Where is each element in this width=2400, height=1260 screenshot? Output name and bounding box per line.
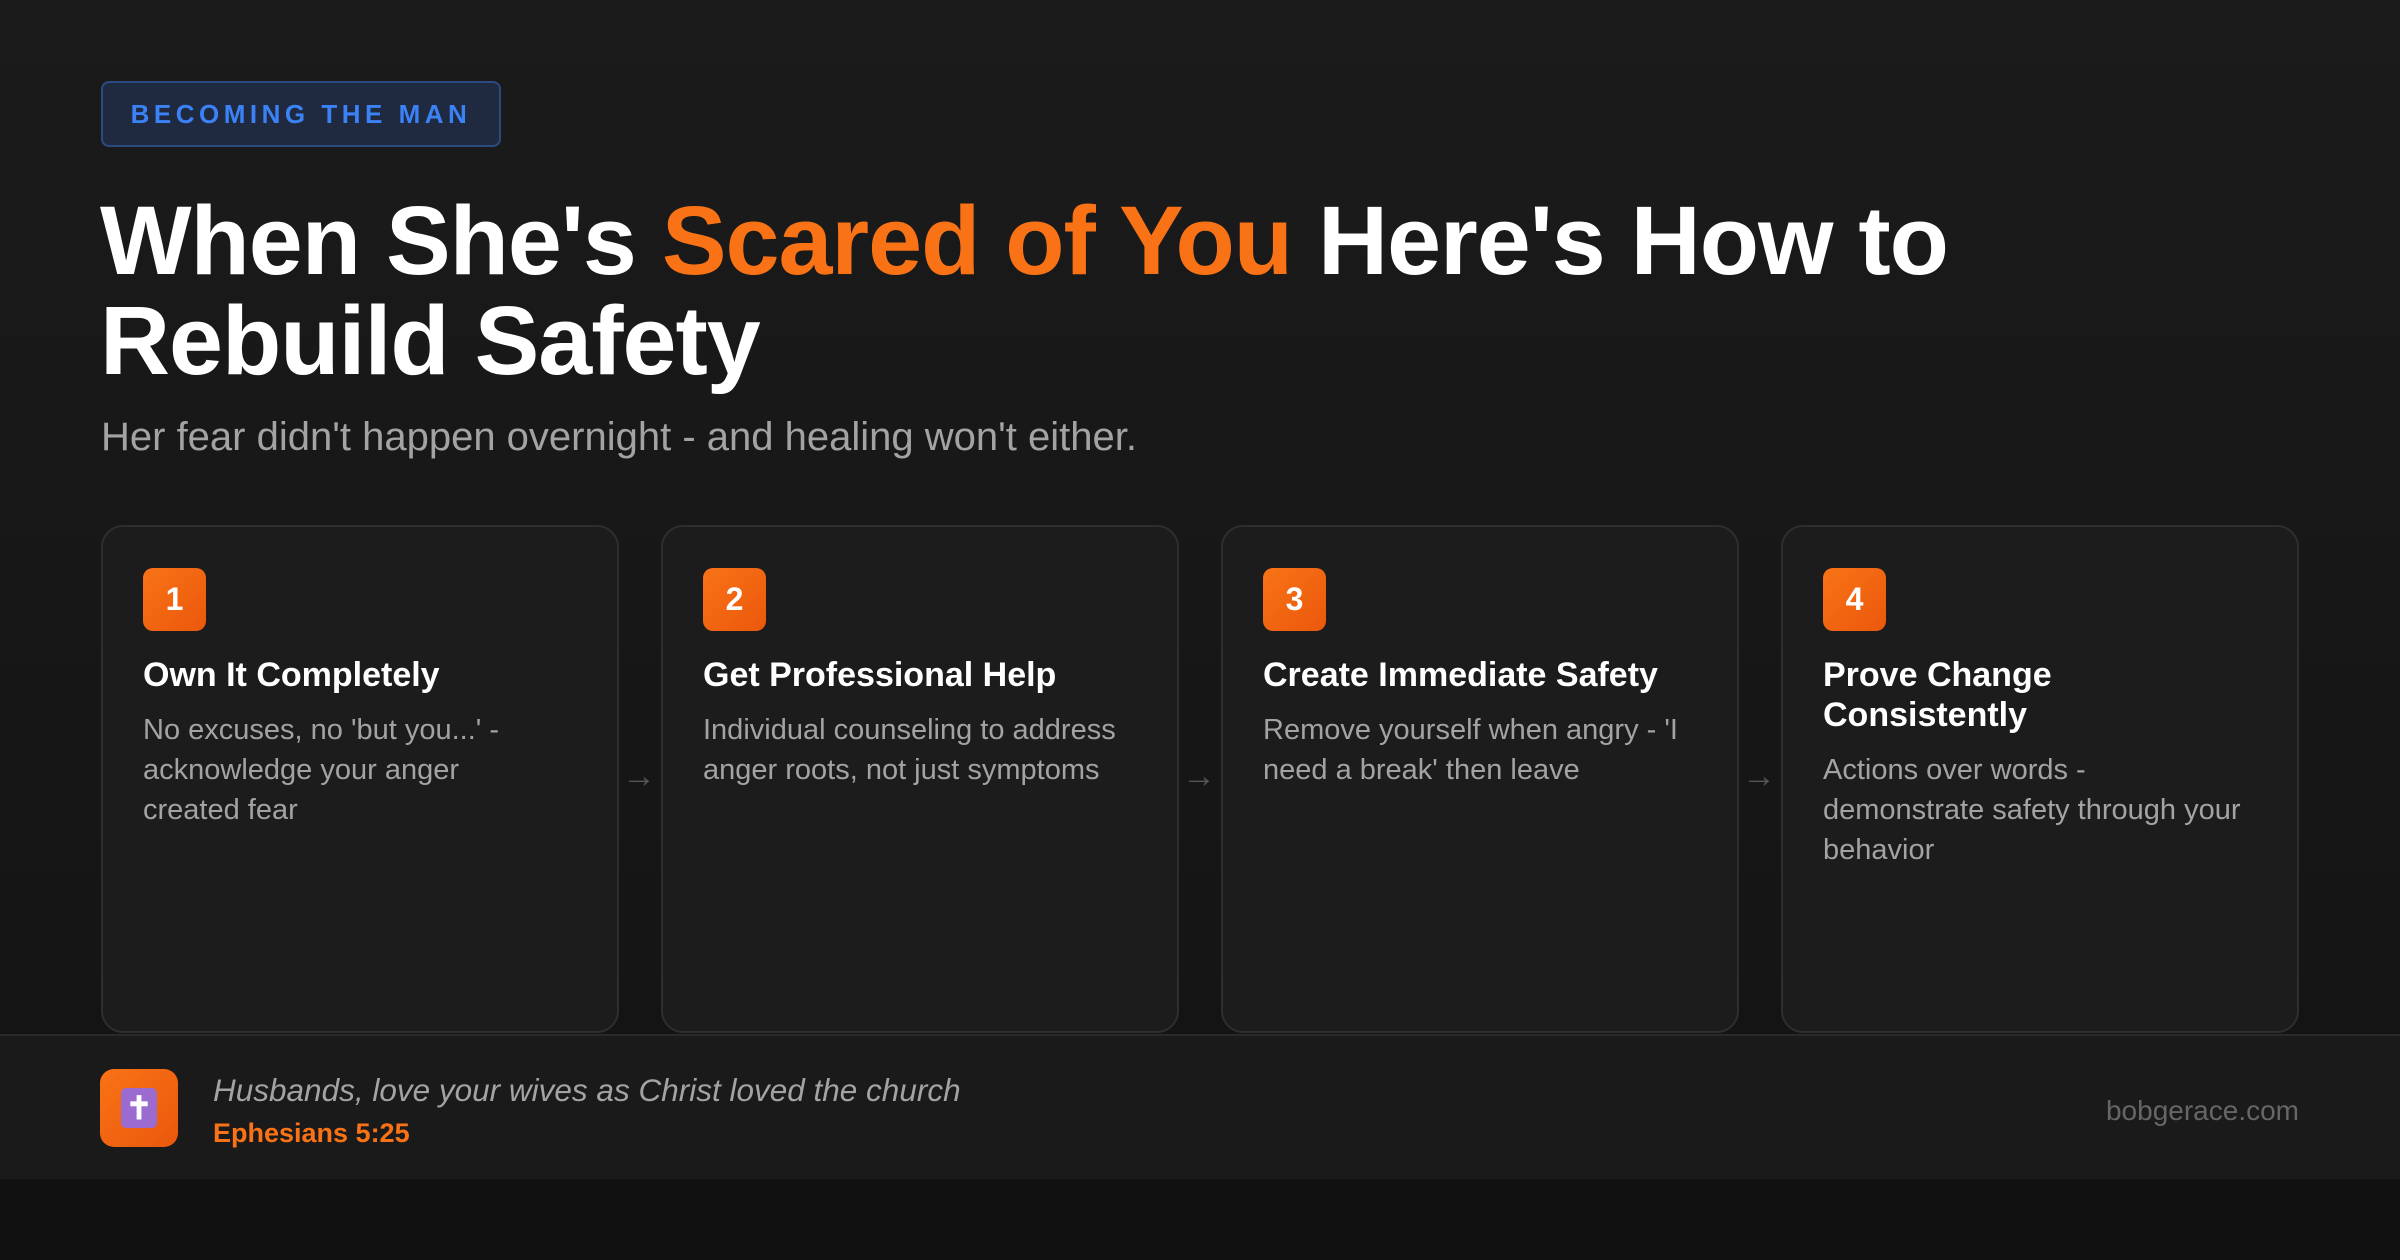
card text 1: No excuses, no 'but you...' - acknowledge your anger created fear — [143, 714, 499, 826]
card 3 — [1221, 525, 1739, 1033]
number badge 2: 2 — [726, 581, 743, 617]
arrow 3: → — [1742, 757, 1776, 795]
title: When She's Scared of You Here's How to Rebuild Safety — [100, 186, 1948, 395]
card title 3: Create Immediate Safety — [1263, 656, 1658, 694]
card 1 — [101, 525, 619, 1033]
icon: cross — [100, 1069, 178, 1147]
card text 3: Remove yourself when angry - 'I need a break' then leave — [1263, 714, 1678, 786]
arrow 2: → — [1182, 757, 1216, 795]
number badge 3: 3 — [1286, 581, 1303, 617]
badge — [101, 81, 501, 147]
footer — [0, 1034, 2400, 1179]
card title 1: Own It Completely — [143, 656, 440, 694]
card title 4: Prove Change Consistently — [1823, 656, 2052, 734]
card 2 — [661, 525, 1179, 1033]
number badge 4: 4 — [1846, 581, 1863, 617]
card title 2: Get Professional Help — [703, 656, 1056, 694]
number badge 3 — [1263, 568, 1326, 631]
reference: Ephesians 5:25 — [213, 1118, 410, 1148]
number badge 1 — [143, 568, 206, 631]
number badge 1: 1 — [166, 581, 183, 617]
card 4 — [1781, 525, 2299, 1033]
card text 4: Actions over words - demonstrate safety through your behavior — [1823, 754, 2241, 866]
number badge 2 — [703, 568, 766, 631]
icon: cross: ✝ — [126, 1090, 152, 1126]
website: bobgerace.com — [2106, 1095, 2299, 1126]
badge: BECOMING THE MAN — [131, 98, 471, 128]
quote: Husbands, love your wives as Christ loved the church — [213, 1072, 961, 1108]
number badge 4 — [1823, 568, 1886, 631]
arrow 1: → — [622, 757, 656, 795]
card text 2: Individual counseling to address anger roots, not just symptoms — [703, 714, 1116, 786]
subtitle: Her fear didn't happen overnight - and healing won't either. — [101, 415, 1137, 459]
